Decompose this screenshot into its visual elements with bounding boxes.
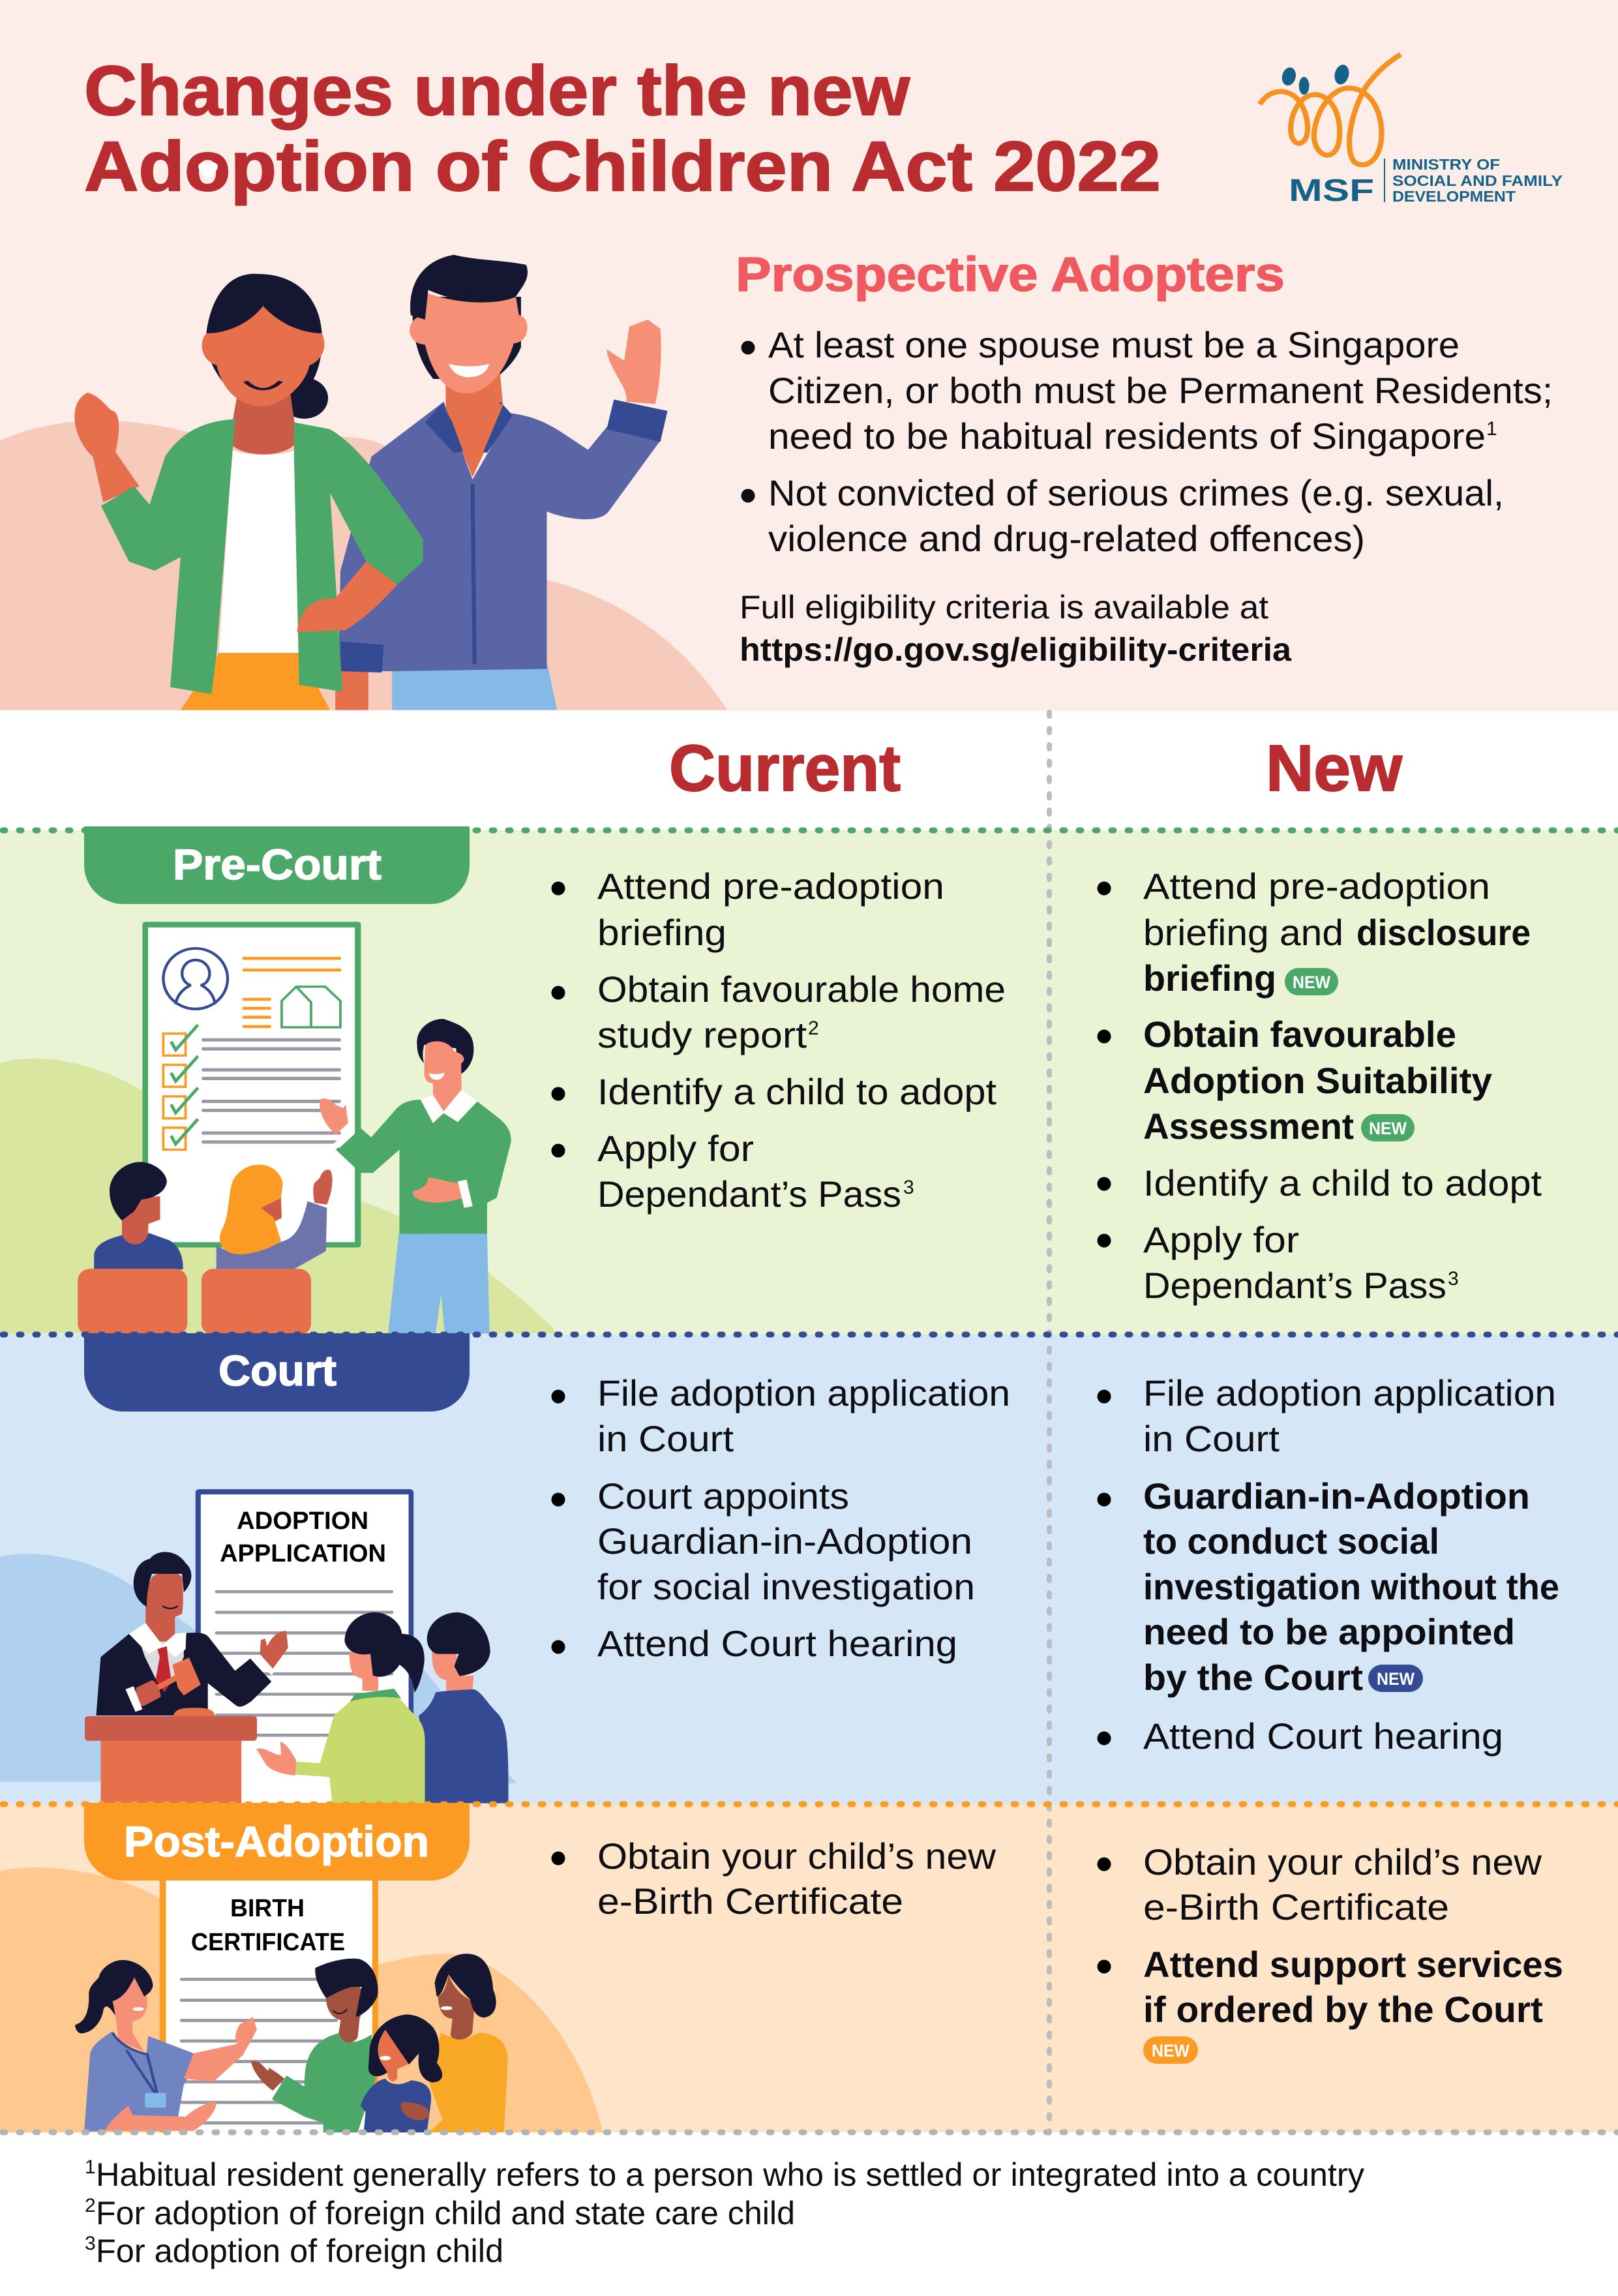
label tab: Pre-Court: Pre-Court (173, 840, 382, 888)
list: court current: Guardian-in-Adoption (597, 1520, 972, 1562)
list: court new: in Court (1143, 1418, 1280, 1459)
list: court new: by the Court (1143, 1657, 1363, 1698)
text block: eligibility bullets (741, 324, 1553, 559)
badge: new (disclosure briefing): NEW (1293, 973, 1330, 992)
heading: Current: Current (669, 732, 901, 805)
text block: eligibility link (740, 589, 1292, 668)
logo: MSF: MINISTRY OF (1392, 156, 1500, 173)
list: post-adoption current: e-Birth Certificate (597, 1881, 903, 1922)
panel: pre-court background (0, 830, 1618, 1335)
list: court new: File adoption application (1143, 1372, 1556, 1413)
text block: eligibility bullets: 1 (1486, 418, 1497, 440)
list: pre-court new (1097, 866, 1542, 1306)
badge: new (guardian-in-adoption) (1368, 1665, 1423, 1692)
list: post-adoption new: Attend support services (1143, 1944, 1563, 1985)
list: pre-court new: briefing and (1143, 912, 1343, 953)
icon: heart in title letter (198, 162, 218, 179)
logo: MSF: MSF (1289, 174, 1374, 208)
list: pre-court new: Obtain favourable (1143, 1014, 1456, 1055)
illustration: pre-court briefing (0, 922, 554, 1335)
heading: Prospective Adopters: Prospective Adopters (736, 247, 1285, 301)
list: court new: Guardian-in-Adoption (1143, 1475, 1530, 1517)
list: pre-court current: 2 (808, 1018, 819, 1039)
text: adoption application document title (220, 1507, 386, 1567)
text: birth certificate document title: BIRTH (230, 1895, 305, 1922)
logo: MSF: SOCIAL AND FAMILY (1392, 172, 1563, 189)
title (84, 51, 1161, 205)
text block: eligibility bullets: violence and drug-related offences) (768, 518, 1365, 559)
illustration: court adoption application (0, 1489, 516, 1804)
text block: eligibility bullets: Not convicted of serious crimes (e.g. sexual, (768, 472, 1504, 513)
footnotes: 3 (85, 2233, 96, 2254)
list: pre-court new: 3 (1448, 1268, 1459, 1290)
icon: MSF swirl and figures (1260, 54, 1401, 165)
text: birth certificate document title: CERTIFICATE (191, 1929, 345, 1956)
text block: eligibility bullets: At least one spouse must be a Singapore (768, 324, 1460, 365)
list: pre-court current: study report (597, 1014, 807, 1055)
footnotes: 2 (85, 2195, 96, 2216)
text block: eligibility bullets: Citizen, or both must be Permanent Residents; (768, 370, 1553, 411)
list: pre-court current: Dependant’s Pass (597, 1173, 901, 1215)
list: court new (1097, 1372, 1559, 1757)
label tab: Court (84, 1333, 470, 1412)
footnotes (85, 2156, 1364, 2269)
list: pre-court new: disclosure (1356, 912, 1531, 953)
label tab: Post-Adoption: Post-Adoption (124, 1817, 429, 1865)
badge: new (adoption suitability assessment): NEW (1369, 1119, 1407, 1138)
list: pre-court new: Attend pre-adoption (1143, 866, 1490, 907)
title: Changes under the new (84, 51, 910, 130)
footnotes: For adoption of foreign child and state care child (96, 2195, 795, 2231)
list: pre-court new: Dependant’s Pass (1143, 1265, 1446, 1306)
list: pre-court new: Adoption Suitability (1143, 1060, 1492, 1101)
text: adoption application document title: APPLICATION (220, 1540, 386, 1567)
text block: eligibility link: Full eligibility criteria is available at (740, 589, 1268, 626)
list: pre-court new: briefing (1143, 958, 1276, 999)
list: pre-court current: Obtain favourable home (597, 969, 1006, 1010)
heading: New: New (1266, 732, 1402, 805)
text: birth certificate document title (191, 1895, 345, 1956)
list: pre-court current (552, 866, 1006, 1215)
list: court current: Attend Court hearing (597, 1623, 957, 1664)
illustration: post-adoption family (0, 1867, 603, 2132)
text block: eligibility bullets: need to be habitual residents of Singapore (768, 415, 1486, 457)
list: post-adoption new: if ordered by the Court (1143, 1989, 1543, 2030)
footnotes: 1 (85, 2156, 96, 2178)
list: court current (552, 1372, 1010, 1664)
title: Adoption of Children Act 2022 (84, 127, 1161, 205)
list: court current: for social investigation (597, 1566, 975, 1607)
list: post-adoption current (552, 1835, 996, 1922)
list: court new: investigation without the (1143, 1566, 1559, 1607)
badge: new (support services) (1143, 2036, 1198, 2064)
list: pre-court current: 3 (903, 1177, 914, 1198)
list: court new: need to be appointed (1143, 1611, 1515, 1652)
list: pre-court current: briefing (597, 912, 727, 953)
list: court current: in Court (597, 1418, 734, 1459)
list: pre-court current: Apply for (597, 1128, 754, 1169)
badge: new (disclosure briefing) (1285, 968, 1338, 995)
label tab: Post-Adoption (84, 1803, 470, 1881)
illustration: couple waving (0, 255, 727, 710)
list: post-adoption new: Obtain your child’s new (1143, 1841, 1542, 1882)
list: post-adoption new: e-Birth Certificate (1143, 1886, 1449, 1927)
list: court new: to conduct social (1143, 1520, 1439, 1562)
label tab: Pre-Court (84, 826, 470, 904)
logo: MSF: DEVELOPMENT (1392, 188, 1516, 205)
panel: court background (0, 1335, 1618, 1804)
text: adoption application document title: ADOPTION (237, 1507, 368, 1535)
list: pre-court new: Assessment (1143, 1106, 1354, 1147)
panel: header background (0, 0, 1618, 711)
panel: post-adoption background (0, 1804, 1618, 2132)
badge: new (adoption suitability assessment) (1361, 1114, 1415, 1141)
label tab: Court: Court (218, 1346, 337, 1395)
list: court new: Attend Court hearing (1143, 1715, 1503, 1757)
badge: new (support services): NEW (1152, 2041, 1190, 2061)
logo: MSF (1260, 54, 1563, 208)
list: court current: File adoption application (597, 1372, 1010, 1413)
list: post-adoption new (1097, 1841, 1563, 2030)
footnotes: Habitual resident generally refers to a person who is settled or integrated into a country (96, 2156, 1364, 2193)
list: post-adoption current: Obtain your child’s new (597, 1835, 996, 1877)
list: pre-court new: Identify a child to adopt (1143, 1162, 1542, 1203)
footnotes: For adoption of foreign child (96, 2233, 503, 2269)
list: pre-court new: Apply for (1143, 1219, 1299, 1260)
text block: eligibility link: https://go.gov.sg/eligibility-criteria (740, 631, 1292, 668)
badge: new (guardian-in-adoption): NEW (1377, 1669, 1415, 1689)
list: pre-court current: Attend pre-adoption (597, 866, 944, 907)
list: pre-court current: Identify a child to adopt (597, 1071, 996, 1112)
list: court current: Court appoints (597, 1475, 849, 1517)
